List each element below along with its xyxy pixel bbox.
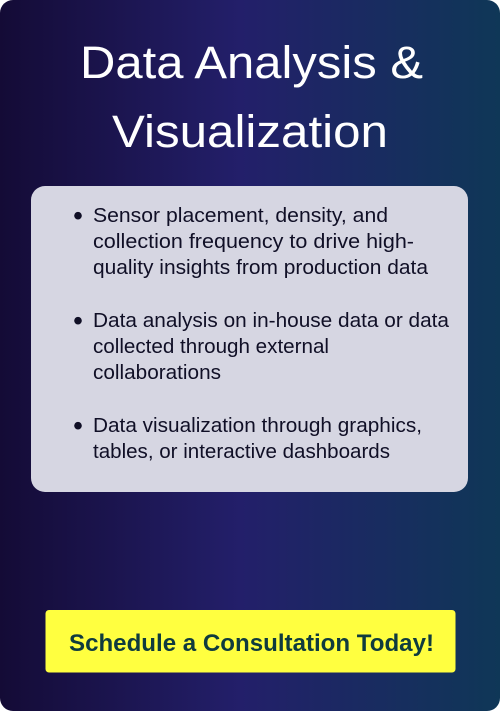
list item: data visualization bbox=[74, 415, 422, 463]
list item: data visualization: tables, or interactive dashboards bbox=[93, 441, 390, 463]
call to action button bbox=[46, 610, 456, 672]
list item: sensor placement bbox=[74, 205, 429, 279]
list item: sensor placement: quality insights from production data bbox=[93, 257, 429, 279]
title: Data Analysis & bbox=[80, 37, 423, 88]
call to action button: Schedule a Consultation Today! bbox=[69, 630, 434, 657]
list item: sensor placement: collection frequency to drive high- bbox=[93, 231, 414, 253]
panel: services list bbox=[31, 186, 468, 492]
list item: data analysis: Data analysis on in-house data or data bbox=[93, 310, 450, 332]
list item: data analysis: collected through external bbox=[93, 336, 329, 358]
title: Visualization bbox=[112, 106, 388, 157]
list item: data analysis: collaborations bbox=[93, 362, 221, 384]
title bbox=[80, 37, 423, 157]
list item: data visualization: Data visualization through graphics, bbox=[93, 415, 422, 437]
list item: sensor placement: Sensor placement, density, and bbox=[93, 205, 388, 227]
list item: data analysis bbox=[74, 310, 450, 384]
